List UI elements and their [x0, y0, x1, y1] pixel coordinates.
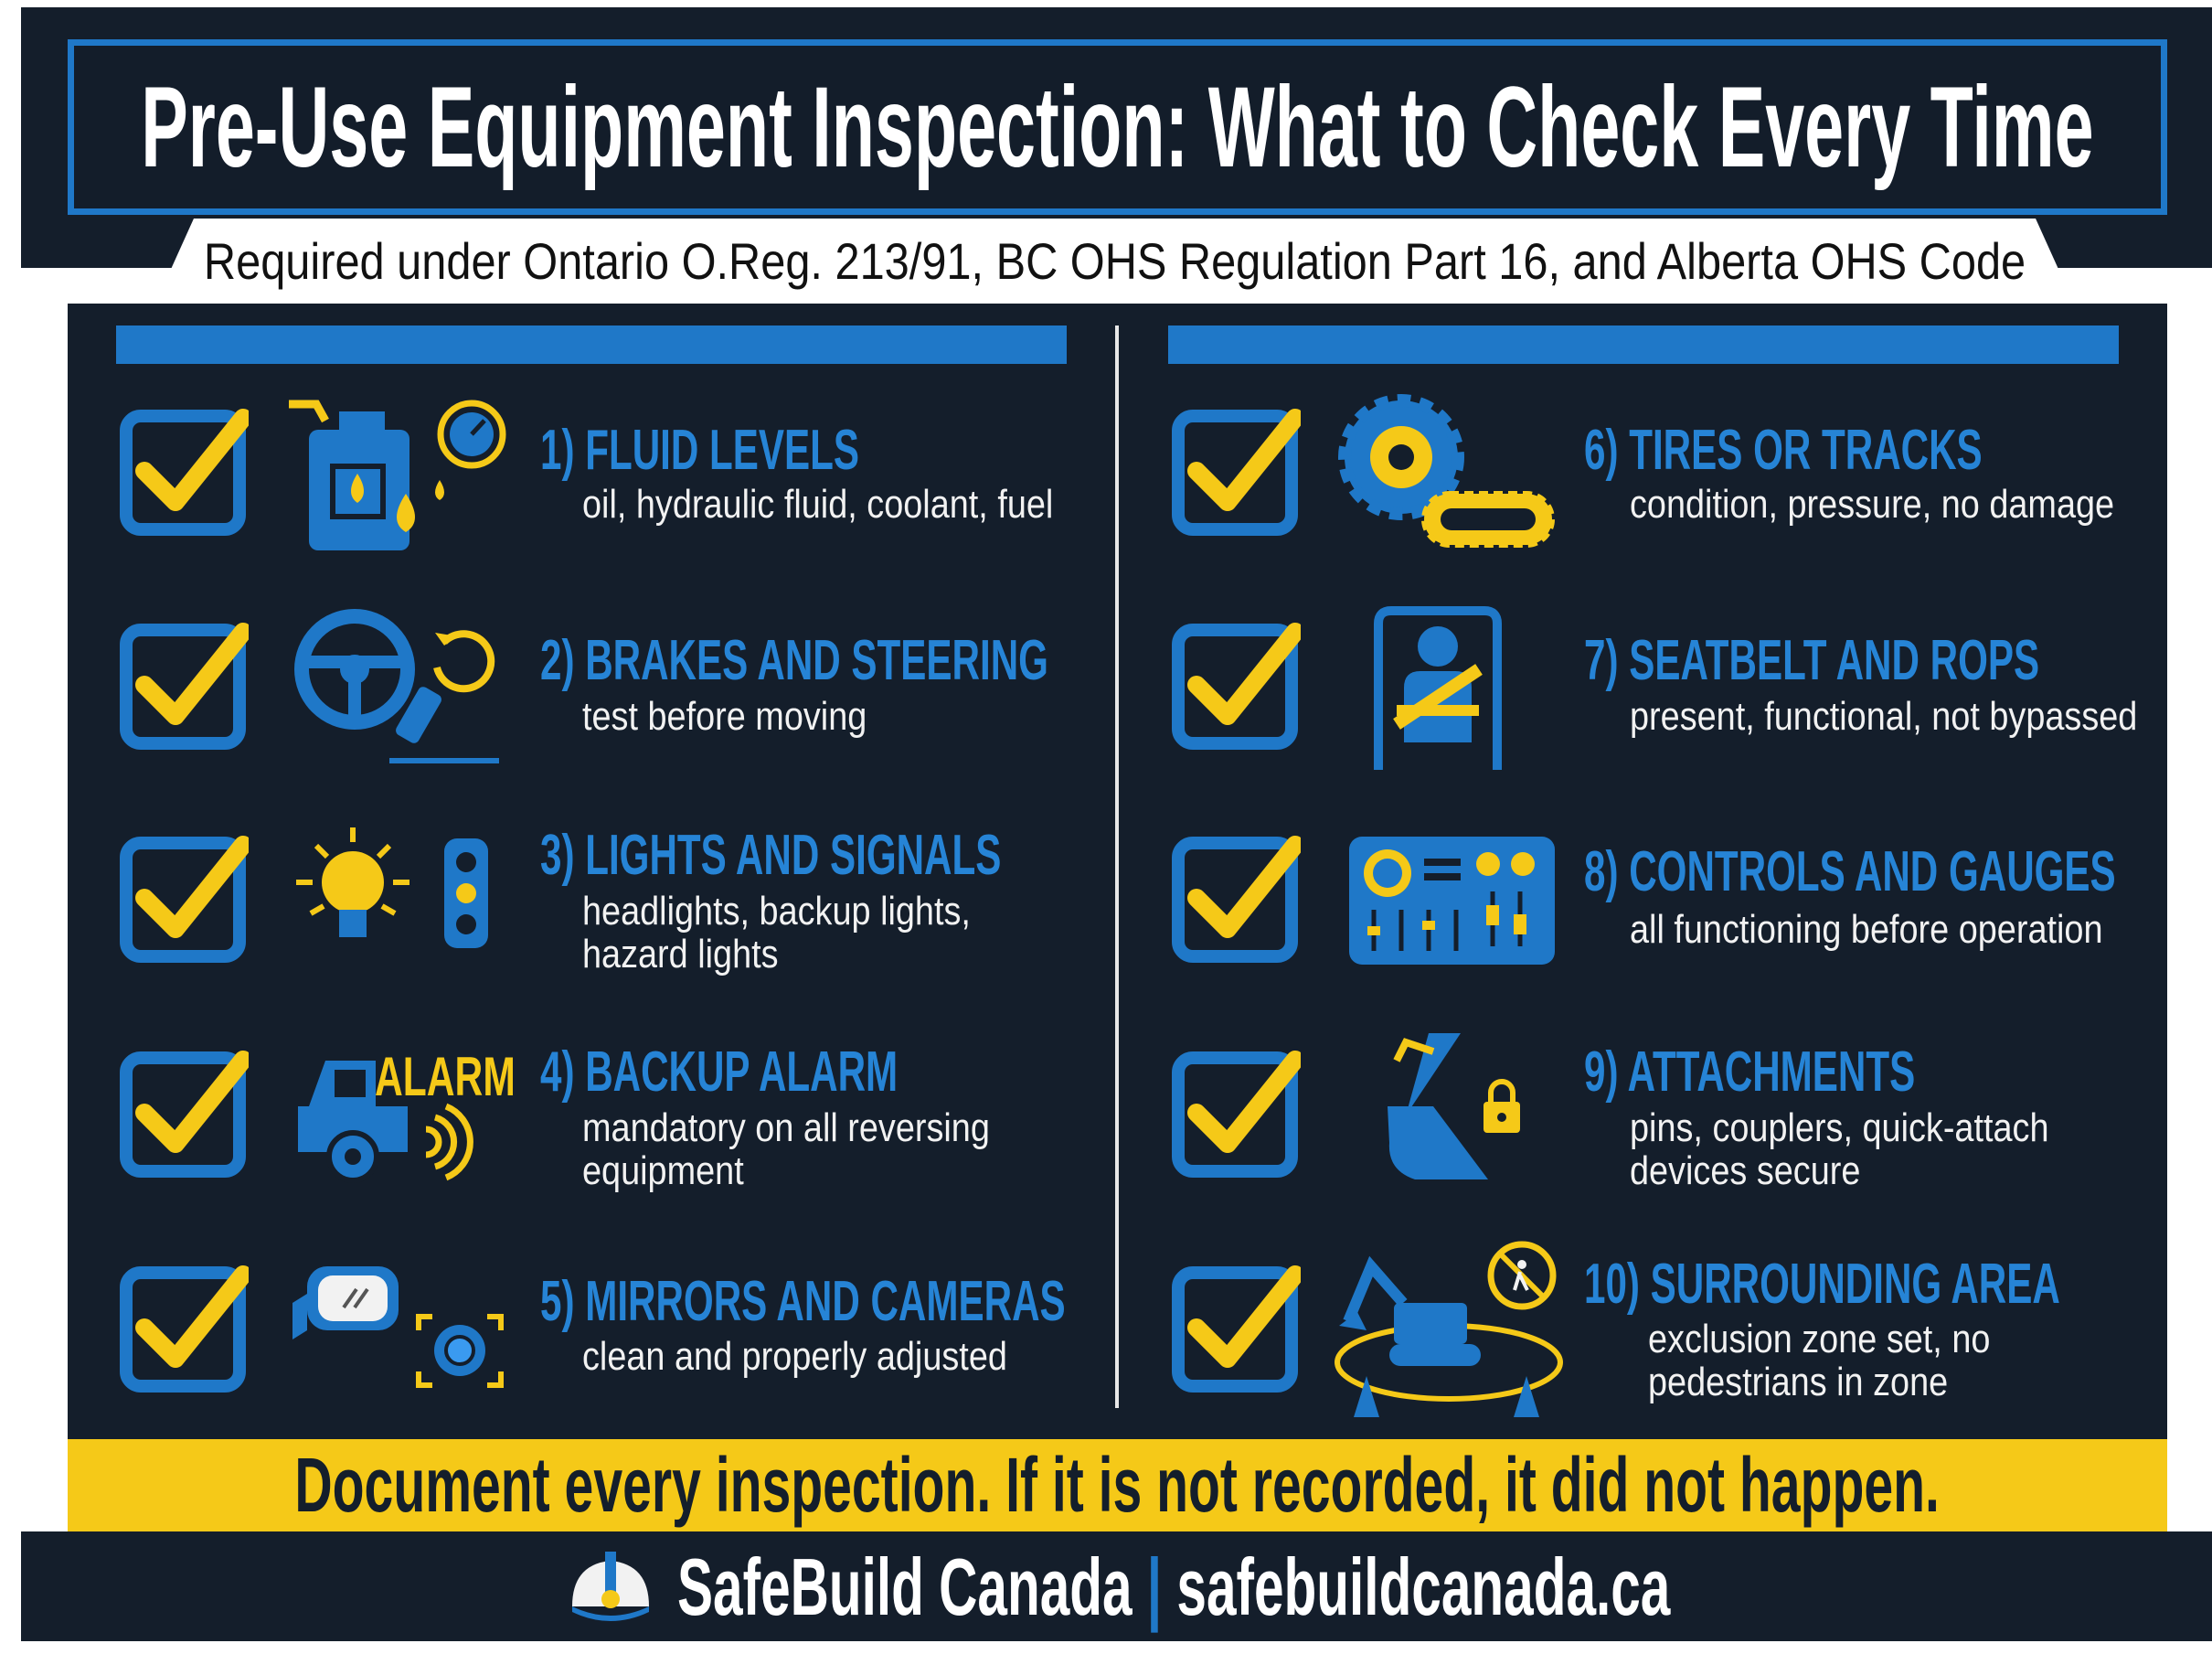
- description: mandatory on all reversing: [582, 1105, 990, 1150]
- header band: [21, 7, 2212, 268]
- footer: [21, 1531, 2212, 1641]
- blue bar left: [116, 325, 1067, 364]
- footer text: SafeBuild Canada | safebuildcanada.ca: [677, 1542, 1670, 1632]
- row 6 right: [1172, 394, 2114, 548]
- heading: 5) MIRRORS AND CAMERAS: [540, 1270, 1066, 1333]
- heading: 10) SURROUNDING AREA: [1584, 1253, 2060, 1316]
- description: [582, 889, 971, 976]
- icon: gear and track: [1338, 394, 1555, 548]
- icon: steering wheel: [294, 609, 499, 763]
- row 1 left: [120, 400, 1053, 550]
- description: hazard lights: [582, 932, 779, 976]
- callout text: Document every inspection. If it is not recorded, it did not happen.: [295, 1442, 1940, 1528]
- icon: mirror and camera: [292, 1266, 504, 1388]
- row 2 left: [120, 609, 1048, 763]
- row 10 right: [1172, 1242, 2060, 1417]
- heading: 9) ATTACHMENTS: [1584, 1040, 1915, 1104]
- description: headlights, backup lights,: [582, 889, 971, 934]
- icon: backup alarm truck: [298, 1046, 516, 1181]
- description: clean and properly adjusted: [582, 1334, 1007, 1379]
- icon: hard hat: [572, 1552, 649, 1621]
- heading: 4) BACKUP ALARM: [540, 1040, 898, 1104]
- icon: bucket attachment with lock: [1388, 1033, 1520, 1179]
- row 8 right: [1172, 836, 2116, 965]
- heading: 3) LIGHTS AND SIGNALS: [540, 824, 1001, 887]
- subtitle: Required under Ontario O.Reg. 213/91, BC OHS Regulation Part 16, and Alberta OHS Code: [204, 232, 2026, 290]
- description: [582, 1105, 990, 1193]
- yellow callout band: [68, 1439, 2167, 1531]
- heading: 7) SEATBELT AND ROPS: [1584, 629, 2039, 692]
- description: condition, pressure, no damage: [1630, 482, 2114, 527]
- icon: control panel: [1349, 837, 1555, 965]
- row 5 left: [120, 1265, 1066, 1393]
- description: oil, hydraulic fluid, coolant, fuel: [582, 482, 1053, 527]
- description: pedestrians in zone: [1648, 1360, 1948, 1404]
- heading: 8) CONTROLS AND GAUGES: [1584, 840, 2116, 903]
- subtitle banner: [172, 219, 2058, 289]
- title: Pre-Use Equipment Inspection: What to Check Every Time: [141, 64, 2094, 190]
- description: [1630, 1105, 2049, 1193]
- description: test before moving: [582, 694, 867, 739]
- heading: 6) TIRES OR TRACKS: [1584, 419, 1983, 482]
- description: equipment: [582, 1148, 744, 1193]
- description: pins, couplers, quick-attach: [1630, 1105, 2049, 1150]
- title box: [68, 39, 2167, 215]
- description: present, functional, not bypassed: [1630, 694, 2137, 739]
- row 3 left: [120, 824, 1001, 976]
- icon: excavator with exclusion zone: [1335, 1242, 1563, 1417]
- description: [1648, 1317, 1990, 1404]
- heading: 2) BRAKES AND STEERING: [540, 629, 1048, 692]
- icon: bulb and traffic light: [296, 827, 488, 948]
- checkbox: [120, 409, 249, 536]
- row 4 left: [120, 1040, 990, 1193]
- blue bar right: [1168, 325, 2119, 364]
- icon: fuel can: [289, 400, 506, 550]
- row 9 right: [1172, 1033, 2049, 1193]
- description: devices secure: [1630, 1148, 1860, 1193]
- heading: 1) FLUID LEVELS: [540, 419, 859, 482]
- description: exclusion zone set, no: [1648, 1317, 1990, 1361]
- icon: seat with seatbelt: [1374, 606, 1502, 770]
- row 7 right: [1172, 606, 2137, 770]
- icon: backup alarm truck: ALARM: [375, 1046, 516, 1107]
- main panel: [68, 304, 2167, 1439]
- description: all functioning before operation: [1630, 907, 2103, 952]
